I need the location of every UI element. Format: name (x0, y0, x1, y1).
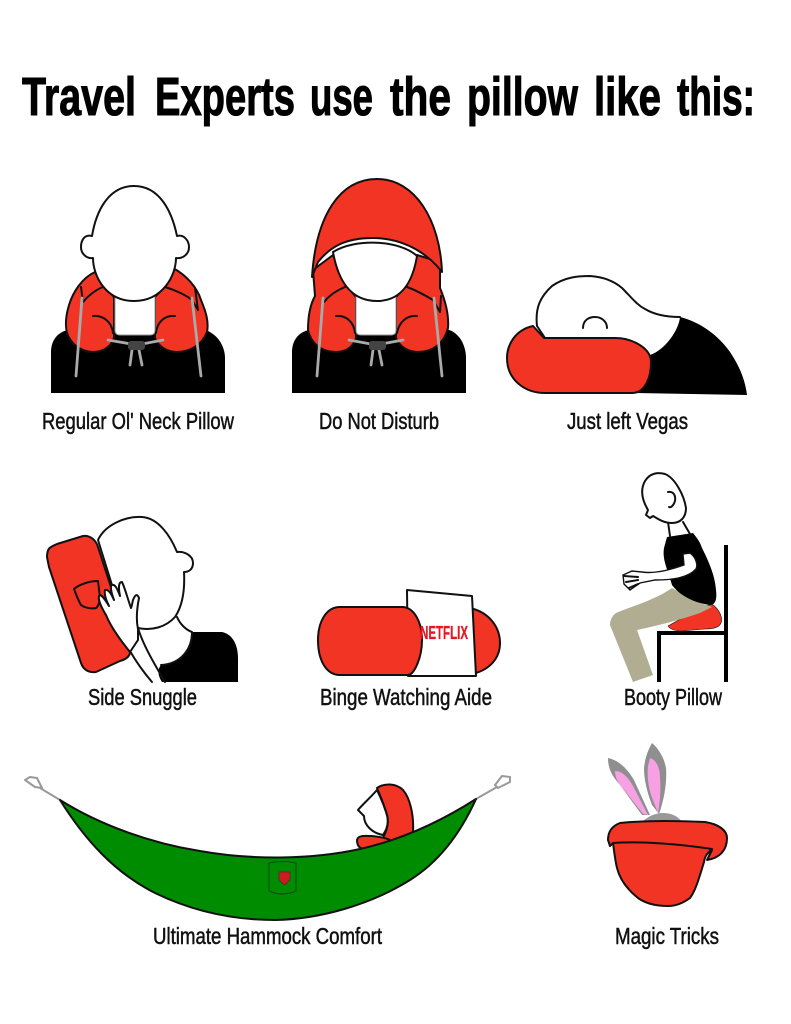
label: just left vegas: Just left Vegas (567, 408, 688, 434)
person: pillow (357, 836, 391, 849)
title: like (594, 67, 661, 127)
fingers (624, 576, 638, 588)
pocket badge (279, 872, 290, 885)
pillow (507, 326, 651, 393)
body: black hoodie (51, 330, 225, 393)
title: Travel (22, 67, 136, 127)
panel: magic tricks (608, 743, 727, 906)
rope and carabiner: left (25, 777, 60, 800)
pocket (269, 862, 296, 894)
title: the (390, 67, 451, 127)
panel: binge watching aide (318, 590, 500, 676)
chair (659, 545, 726, 682)
pillow pocket (74, 581, 100, 608)
neck (356, 293, 396, 335)
pillow (47, 536, 131, 672)
arm (623, 553, 697, 590)
person: hood (377, 784, 413, 842)
cushion (668, 604, 722, 631)
body: black shirt (158, 632, 238, 682)
rabbit ear: left (608, 758, 650, 815)
panel: do not disturb (292, 179, 466, 393)
rabbit ear inner: right (648, 758, 660, 813)
ear (668, 492, 675, 507)
title: this: (677, 67, 755, 127)
head (642, 473, 686, 523)
panel: booty pillow (610, 473, 726, 682)
pillow: red neck pillow (308, 255, 448, 352)
panel: hammock comfort (25, 776, 510, 920)
pillow fold lines (324, 287, 441, 333)
face (333, 243, 417, 301)
netflix logo: NETFLIX (420, 623, 468, 643)
pillow top (608, 821, 727, 860)
hand (99, 582, 139, 652)
body: black hoodie (292, 330, 466, 393)
drawcords (76, 298, 201, 376)
drawcords (317, 298, 442, 376)
pillow: red neck pillow (66, 268, 208, 352)
head (81, 186, 189, 301)
title: pillow (467, 67, 579, 127)
panel: regular neck pillow (51, 186, 225, 393)
hammock (60, 799, 476, 920)
label: regular neck pillow: Regular Ol' Neck Pillow (42, 408, 234, 434)
neck and arm (130, 617, 192, 682)
head (537, 276, 680, 355)
head outline (537, 276, 680, 338)
tablet (407, 590, 476, 676)
label: magic tricks: Magic Tricks (615, 923, 719, 949)
person: face (358, 790, 388, 835)
rabbit head (642, 813, 682, 822)
label: booty pillow: Booty Pillow (624, 684, 722, 710)
body: black shoulder (636, 317, 747, 395)
pillow fold lines (81, 287, 198, 333)
label: side snuggle: Side Snuggle (88, 684, 197, 710)
pillow: right end (470, 608, 500, 674)
title (22, 67, 755, 127)
rabbit ear: right (644, 743, 666, 814)
torso (664, 533, 716, 605)
ear (583, 317, 607, 328)
label: do not disturb: Do Not Disturb (319, 408, 439, 434)
head (98, 517, 193, 629)
hood (312, 179, 442, 277)
neck (668, 522, 690, 536)
label: binge watching aide: Binge Watching Aide (320, 684, 492, 710)
label: hammock comfort: Ultimate Hammock Comfort (153, 923, 382, 949)
rope and carabiner: right (476, 776, 510, 799)
cord toggle (128, 341, 145, 350)
cord toggle (369, 341, 386, 350)
title: Experts (155, 67, 295, 127)
title: use (310, 67, 373, 127)
rabbit ear inner: left (615, 771, 648, 815)
pillow body (613, 842, 712, 906)
panel: side snuggle (47, 517, 238, 682)
pillow: left part (318, 607, 422, 675)
pants (610, 588, 712, 682)
neck (115, 293, 155, 335)
panel: just left vegas (507, 276, 747, 395)
